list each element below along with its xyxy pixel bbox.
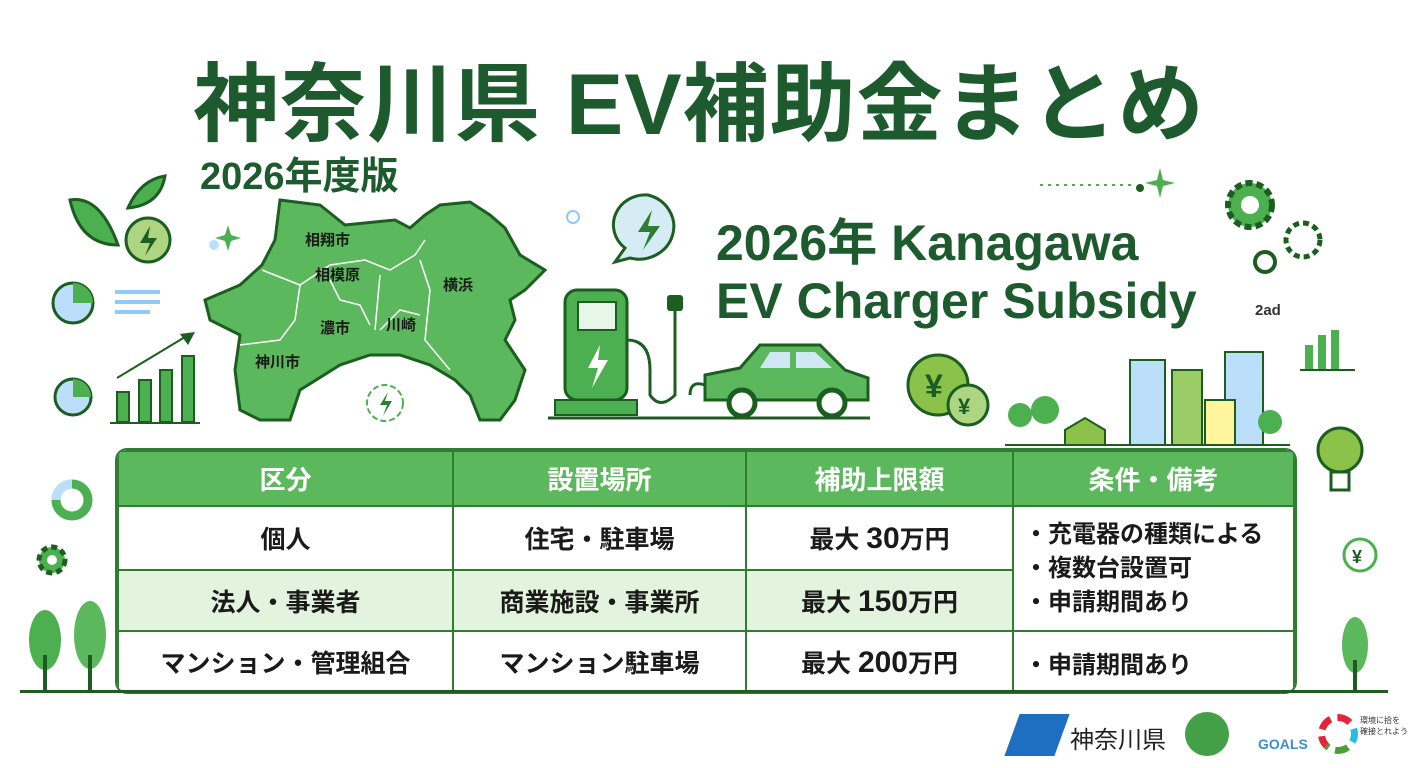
illustration: map and icons [52, 168, 1355, 446]
logo: GOALS: GOALS [1258, 736, 1308, 752]
icon: small bar chart right [1300, 330, 1355, 370]
table: 最大 30万円 [809, 522, 950, 555]
icon: yen circle: ¥ [1352, 547, 1362, 567]
map: Kanagawa: 神川市 [255, 353, 300, 371]
icon: trees [29, 601, 106, 690]
icon: yen coins: ¥ [925, 368, 943, 404]
table: 住宅・駐車場 [524, 526, 674, 554]
icon: light bulb [1318, 428, 1362, 490]
footer logos: 環境に拾を [1360, 716, 1400, 725]
table: マンション・管理組合 [160, 650, 410, 678]
table: 設置場所 [547, 465, 652, 495]
icon: plant [1342, 617, 1368, 690]
decorative right icons [1316, 426, 1378, 690]
icon: gears [1228, 183, 1320, 272]
subtitle: English: 2026年 Kanagawa [716, 215, 1138, 271]
title: 神奈川県 EV補助金まとめ [193, 57, 1205, 153]
table: 補助上限額 [814, 465, 944, 495]
subtitle: edition: 2026年度版 [200, 156, 399, 198]
map: Kanagawa: 横浜 [443, 277, 473, 294]
subtitle: English: EV Charger Subsidy [716, 273, 1197, 329]
logo: SDG ring [1318, 714, 1358, 754]
table: 個人 [260, 526, 310, 554]
icon: leaves [70, 176, 170, 262]
decorative left icons [29, 480, 106, 690]
table: ・申請期間あり [1024, 652, 1192, 678]
icon: gear [39, 547, 65, 573]
map: Kanagawa: 濃市 [320, 319, 350, 337]
table: ・複数台設置可 [1024, 554, 1192, 582]
baseline [20, 690, 1388, 693]
logo: EV circle [1185, 712, 1229, 756]
subtitle: English [716, 215, 1197, 329]
table [115, 448, 1297, 694]
footer logos [1004, 712, 1408, 756]
table: 条件・備考 [1088, 465, 1218, 495]
icon: yen circle [1344, 539, 1376, 571]
icon: car [690, 345, 868, 416]
table: 商業施設・事業所 [499, 588, 700, 616]
table: ・充電器の種類による [1024, 520, 1263, 548]
icon: speech bubble bolt [613, 195, 674, 262]
map: Kanagawa [205, 200, 545, 420]
icon: bar chart with arrow [110, 332, 200, 423]
table: 区分 [259, 465, 312, 495]
map: Kanagawa: 相模原 [315, 266, 360, 284]
table: 法人・事業者 [210, 588, 360, 616]
icon: donut [56, 484, 88, 516]
table: 最大 200万円 [801, 646, 958, 679]
icon: city [1005, 352, 1290, 445]
icon: sparkle and dots [209, 168, 1175, 251]
icon: EV charger [548, 290, 870, 418]
icon: charging circle [367, 385, 403, 421]
table: ・申請期間あり [1024, 588, 1192, 616]
map: Kanagawa: 相翔市 [305, 231, 350, 249]
logo: Kanagawa [1004, 714, 1070, 756]
icon: pie charts and list [53, 283, 160, 415]
footer logos: 確接とれよう [1360, 727, 1408, 736]
table: マンション駐車場 [499, 650, 700, 678]
icon: yen coins [908, 355, 988, 425]
footer logos: 神奈川県 [1070, 727, 1166, 754]
small label: 2ad [1255, 302, 1281, 319]
map: Kanagawa: 川崎 [386, 316, 416, 334]
icon: yen coins: ¥ [958, 394, 971, 419]
table: 最大 150万円 [801, 584, 958, 618]
